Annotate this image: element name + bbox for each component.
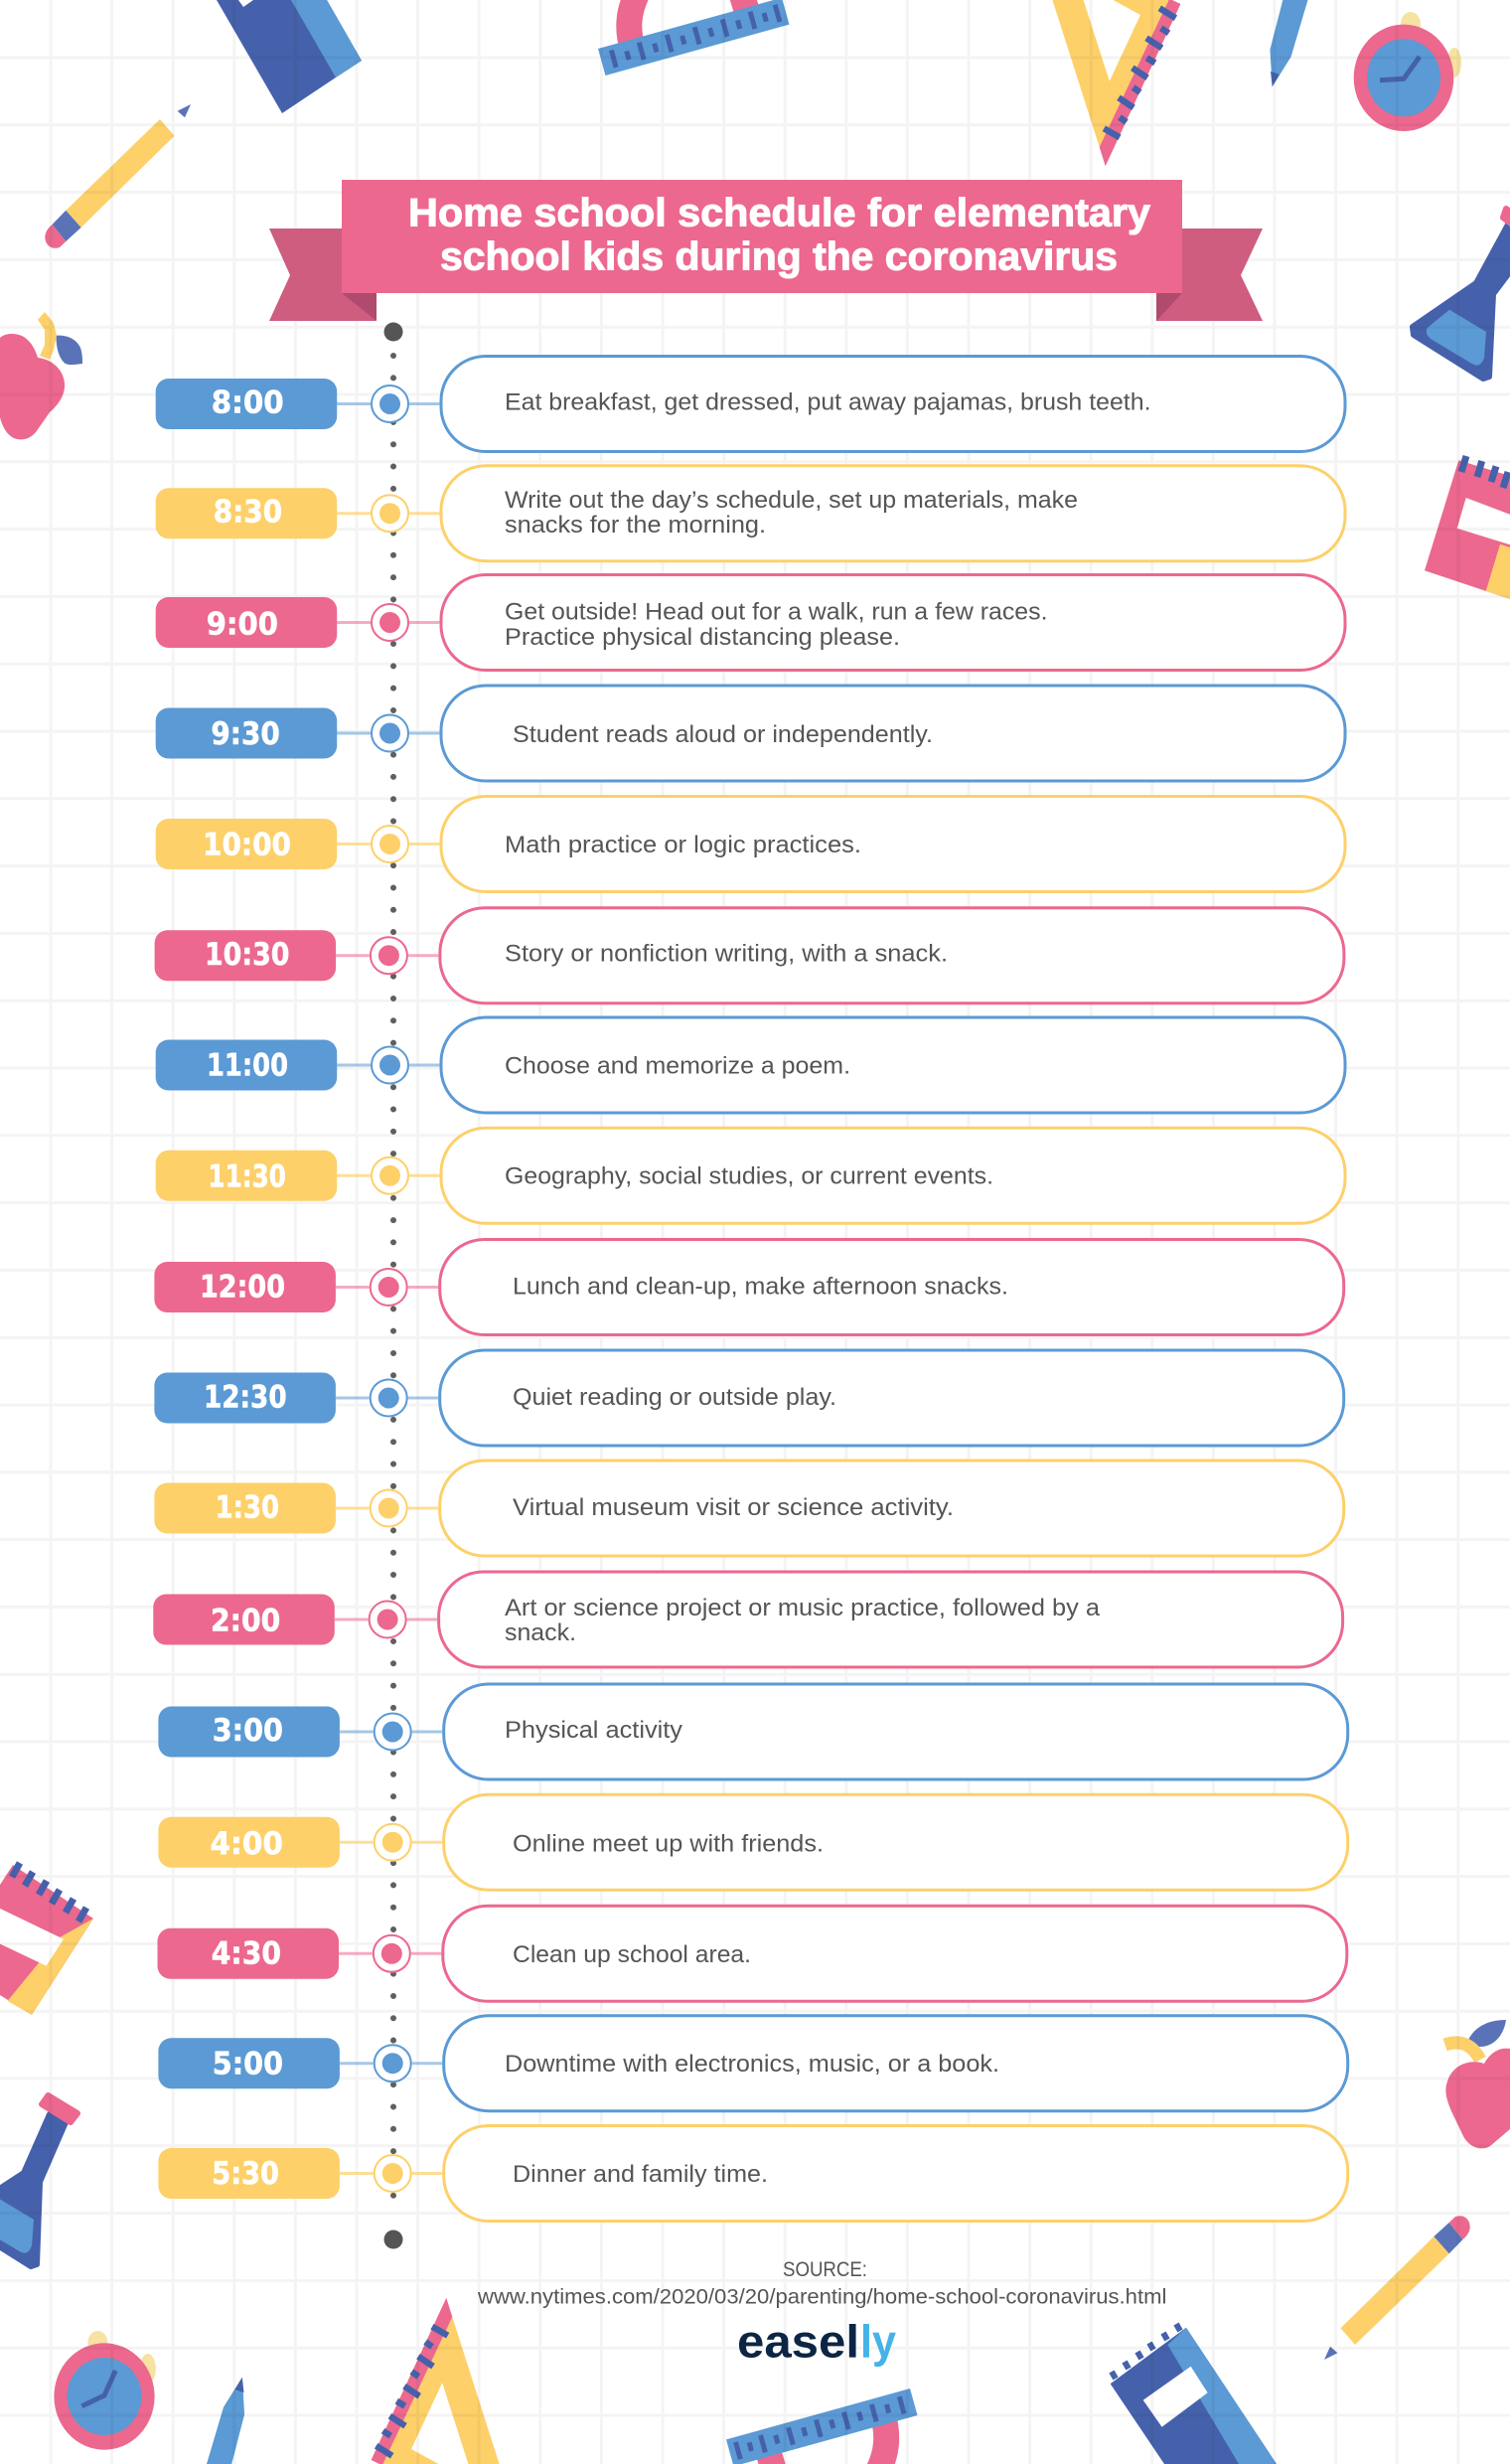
row 2:00 <box>153 1572 1343 1667</box>
row 8:00 <box>156 356 1345 451</box>
icon: apple right <box>1445 2020 1510 2148</box>
timeline node <box>336 1379 438 1417</box>
activity bubble <box>444 2016 1348 2111</box>
activity bubble: Quiet reading or outside play. <box>513 1384 836 1411</box>
icon: flask top right <box>1413 209 1510 379</box>
title text: school kids during the coronavirus <box>440 235 1118 279</box>
activity bubble <box>441 686 1345 781</box>
time pill 5:30: 5:30 <box>212 2156 279 2192</box>
source text: www.nytimes.com/2020/03/20/parenting/home-school-coronavirus.html <box>477 2285 1166 2308</box>
activity bubble: Physical activity <box>505 1717 682 1744</box>
easelly logo: ly <box>860 2316 896 2368</box>
time pill 9:00: 9:00 <box>207 607 278 643</box>
icon: alarm clock bottom <box>54 2331 156 2450</box>
icon: pencil top left <box>45 104 191 248</box>
activity bubble: Clean up school area. <box>513 1941 751 1968</box>
activity bubble: Online meet up with friends. <box>513 1830 824 1857</box>
timeline node <box>340 2155 442 2192</box>
row 9:00 <box>156 574 1345 670</box>
time pill 2:00: 2:00 <box>211 1604 280 1639</box>
activity bubble <box>440 908 1344 1003</box>
time pill 4:00: 4:00 <box>211 1826 283 1862</box>
activity bubble <box>444 2126 1348 2222</box>
title banner <box>269 180 1263 321</box>
time pill 9:00 <box>156 597 337 648</box>
activity bubble <box>440 1350 1344 1446</box>
activity bubble: Math practice or logic practices. <box>505 832 861 858</box>
time pill 4:00 <box>158 1817 340 1868</box>
timeline node <box>340 1824 442 1861</box>
activity bubble: Geography, social studies, or current events. <box>505 1163 993 1190</box>
activity bubble <box>441 466 1345 561</box>
time pill 10:30 <box>155 930 336 981</box>
time pill 12:30: 12:30 <box>204 1380 287 1416</box>
timeline node <box>340 1713 442 1751</box>
row 9:30 <box>156 686 1345 781</box>
title text <box>408 191 1151 279</box>
activity bubble <box>439 1572 1343 1667</box>
activity bubble <box>441 356 1345 451</box>
row 4:00 <box>158 1794 1348 1890</box>
activity bubble: Dinner and family time. <box>513 2161 768 2188</box>
timeline node <box>337 385 439 422</box>
time pill 5:00 <box>158 2038 340 2088</box>
time pill 3:00: 3:00 <box>213 1713 283 1749</box>
activity bubble: Eat breakfast, get dressed, put away pajamas, brush teeth. <box>505 389 1150 416</box>
timeline node <box>335 1602 437 1637</box>
time pill 5:00: 5:00 <box>213 2047 283 2082</box>
activity bubble <box>443 1906 1347 2001</box>
time pill 8:30: 8:30 <box>214 495 282 531</box>
row 5:30 <box>158 2126 1348 2222</box>
time pill 8:30 <box>156 488 337 539</box>
icon: notebook right <box>1425 456 1510 599</box>
row 11:00 <box>156 1017 1345 1113</box>
activity bubble <box>441 1128 1345 1223</box>
time pill 12:00: 12:00 <box>200 1270 285 1306</box>
row 10:00 <box>156 797 1345 892</box>
timeline node <box>337 826 439 862</box>
time pill 4:30 <box>157 1928 339 1979</box>
icon: notebook top <box>217 0 362 113</box>
banner tails <box>269 229 1263 321</box>
icon: pencil bottom right <box>1324 2216 1470 2360</box>
time pill 9:30: 9:30 <box>211 716 280 752</box>
icon: crayon bottom <box>207 2378 244 2464</box>
time pill 10:00 <box>156 819 337 869</box>
source text <box>477 2258 1166 2308</box>
icon: alarm clock top <box>1354 12 1461 131</box>
icon: protractor bottom <box>726 2388 918 2464</box>
activity bubble: Choose and memorize a poem. <box>505 1053 850 1080</box>
timeline node <box>337 495 439 532</box>
icon: triangle ruler bottom <box>372 2298 500 2464</box>
activity bubble <box>444 1684 1348 1779</box>
easelly logo: easel <box>737 2316 859 2368</box>
time pill 11:00: 11:00 <box>207 1048 288 1084</box>
row 5:00 <box>158 2016 1348 2111</box>
activity bubble <box>440 1461 1344 1556</box>
timeline node <box>337 604 439 641</box>
activity bubble <box>441 1017 1345 1113</box>
row 11:30 <box>156 1128 1345 1223</box>
row 8:30 <box>156 466 1345 561</box>
time pill 11:30 <box>156 1151 337 1201</box>
time pill 11:00 <box>156 1039 337 1091</box>
time pill 4:30: 4:30 <box>212 1936 281 1972</box>
row 3:00 <box>158 1684 1348 1779</box>
time pill 10:00: 10:00 <box>203 828 291 863</box>
timeline node <box>337 1157 439 1194</box>
activity bubble <box>441 797 1345 892</box>
timeline node <box>337 715 439 751</box>
time pill 12:00 <box>154 1262 336 1312</box>
timeline dots <box>383 322 403 2249</box>
activity bubble: Practice physical distancing please. <box>505 624 900 651</box>
activity bubble: Get outside! Head out for a walk, run a few races. <box>505 598 1047 625</box>
activity bubble <box>441 574 1345 670</box>
time pill 8:00 <box>156 379 337 429</box>
icon: flask bottom left <box>0 2095 77 2266</box>
timeline node <box>336 1490 438 1526</box>
icon: apple left <box>0 312 82 439</box>
icon: notebook bottom right <box>1111 2324 1277 2464</box>
time pill 5:30 <box>158 2148 340 2199</box>
row 10:30 <box>155 908 1344 1003</box>
row 4:30 <box>157 1906 1347 2001</box>
activity bubble: snacks for the morning. <box>505 512 766 539</box>
activity bubble: Write out the day’s schedule, set up materials, make <box>505 487 1078 514</box>
activity bubble <box>440 1240 1344 1335</box>
activity bubble: Student reads aloud or independently. <box>513 721 933 748</box>
timeline node <box>339 1935 441 1972</box>
time pill 10:30: 10:30 <box>205 937 290 973</box>
timeline node <box>337 1047 439 1083</box>
timeline node <box>336 937 438 974</box>
time pill 3:00 <box>158 1707 340 1757</box>
icon: protractor top <box>598 0 789 76</box>
time pill 9:30 <box>156 707 337 759</box>
activity bubble: Story or nonfiction writing, with a snack. <box>505 940 948 967</box>
time pill 1:30: 1:30 <box>216 1490 279 1526</box>
timeline node <box>340 2045 442 2081</box>
time pill 11:30: 11:30 <box>208 1159 286 1195</box>
time pill 8:00: 8:00 <box>212 385 284 420</box>
activity bubble: snack. <box>505 1619 576 1646</box>
icon: triangle ruler top <box>1052 0 1180 166</box>
time pill 1:30 <box>154 1482 336 1534</box>
row 1:30 <box>154 1461 1344 1556</box>
activity bubble: Lunch and clean-up, make afternoon snacks. <box>513 1273 1008 1300</box>
activity bubble: Downtime with electronics, music, or a book. <box>505 2051 999 2078</box>
timeline node <box>336 1269 438 1306</box>
activity bubble <box>444 1794 1348 1890</box>
row 12:30 <box>154 1350 1344 1446</box>
activity bubble: Art or science project or music practice, followed by a <box>505 1595 1101 1621</box>
icon: crayon top <box>1270 0 1307 86</box>
row 12:00 <box>154 1240 1344 1335</box>
activity bubble: Virtual museum visit or science activity. <box>513 1494 954 1521</box>
time pill 12:30 <box>154 1373 336 1423</box>
title text: Home school schedule for elementary <box>408 191 1151 234</box>
source text: SOURCE: <box>783 2258 867 2281</box>
icon: notebook bottom left <box>0 1863 93 2015</box>
time pill 2:00 <box>153 1594 335 1645</box>
